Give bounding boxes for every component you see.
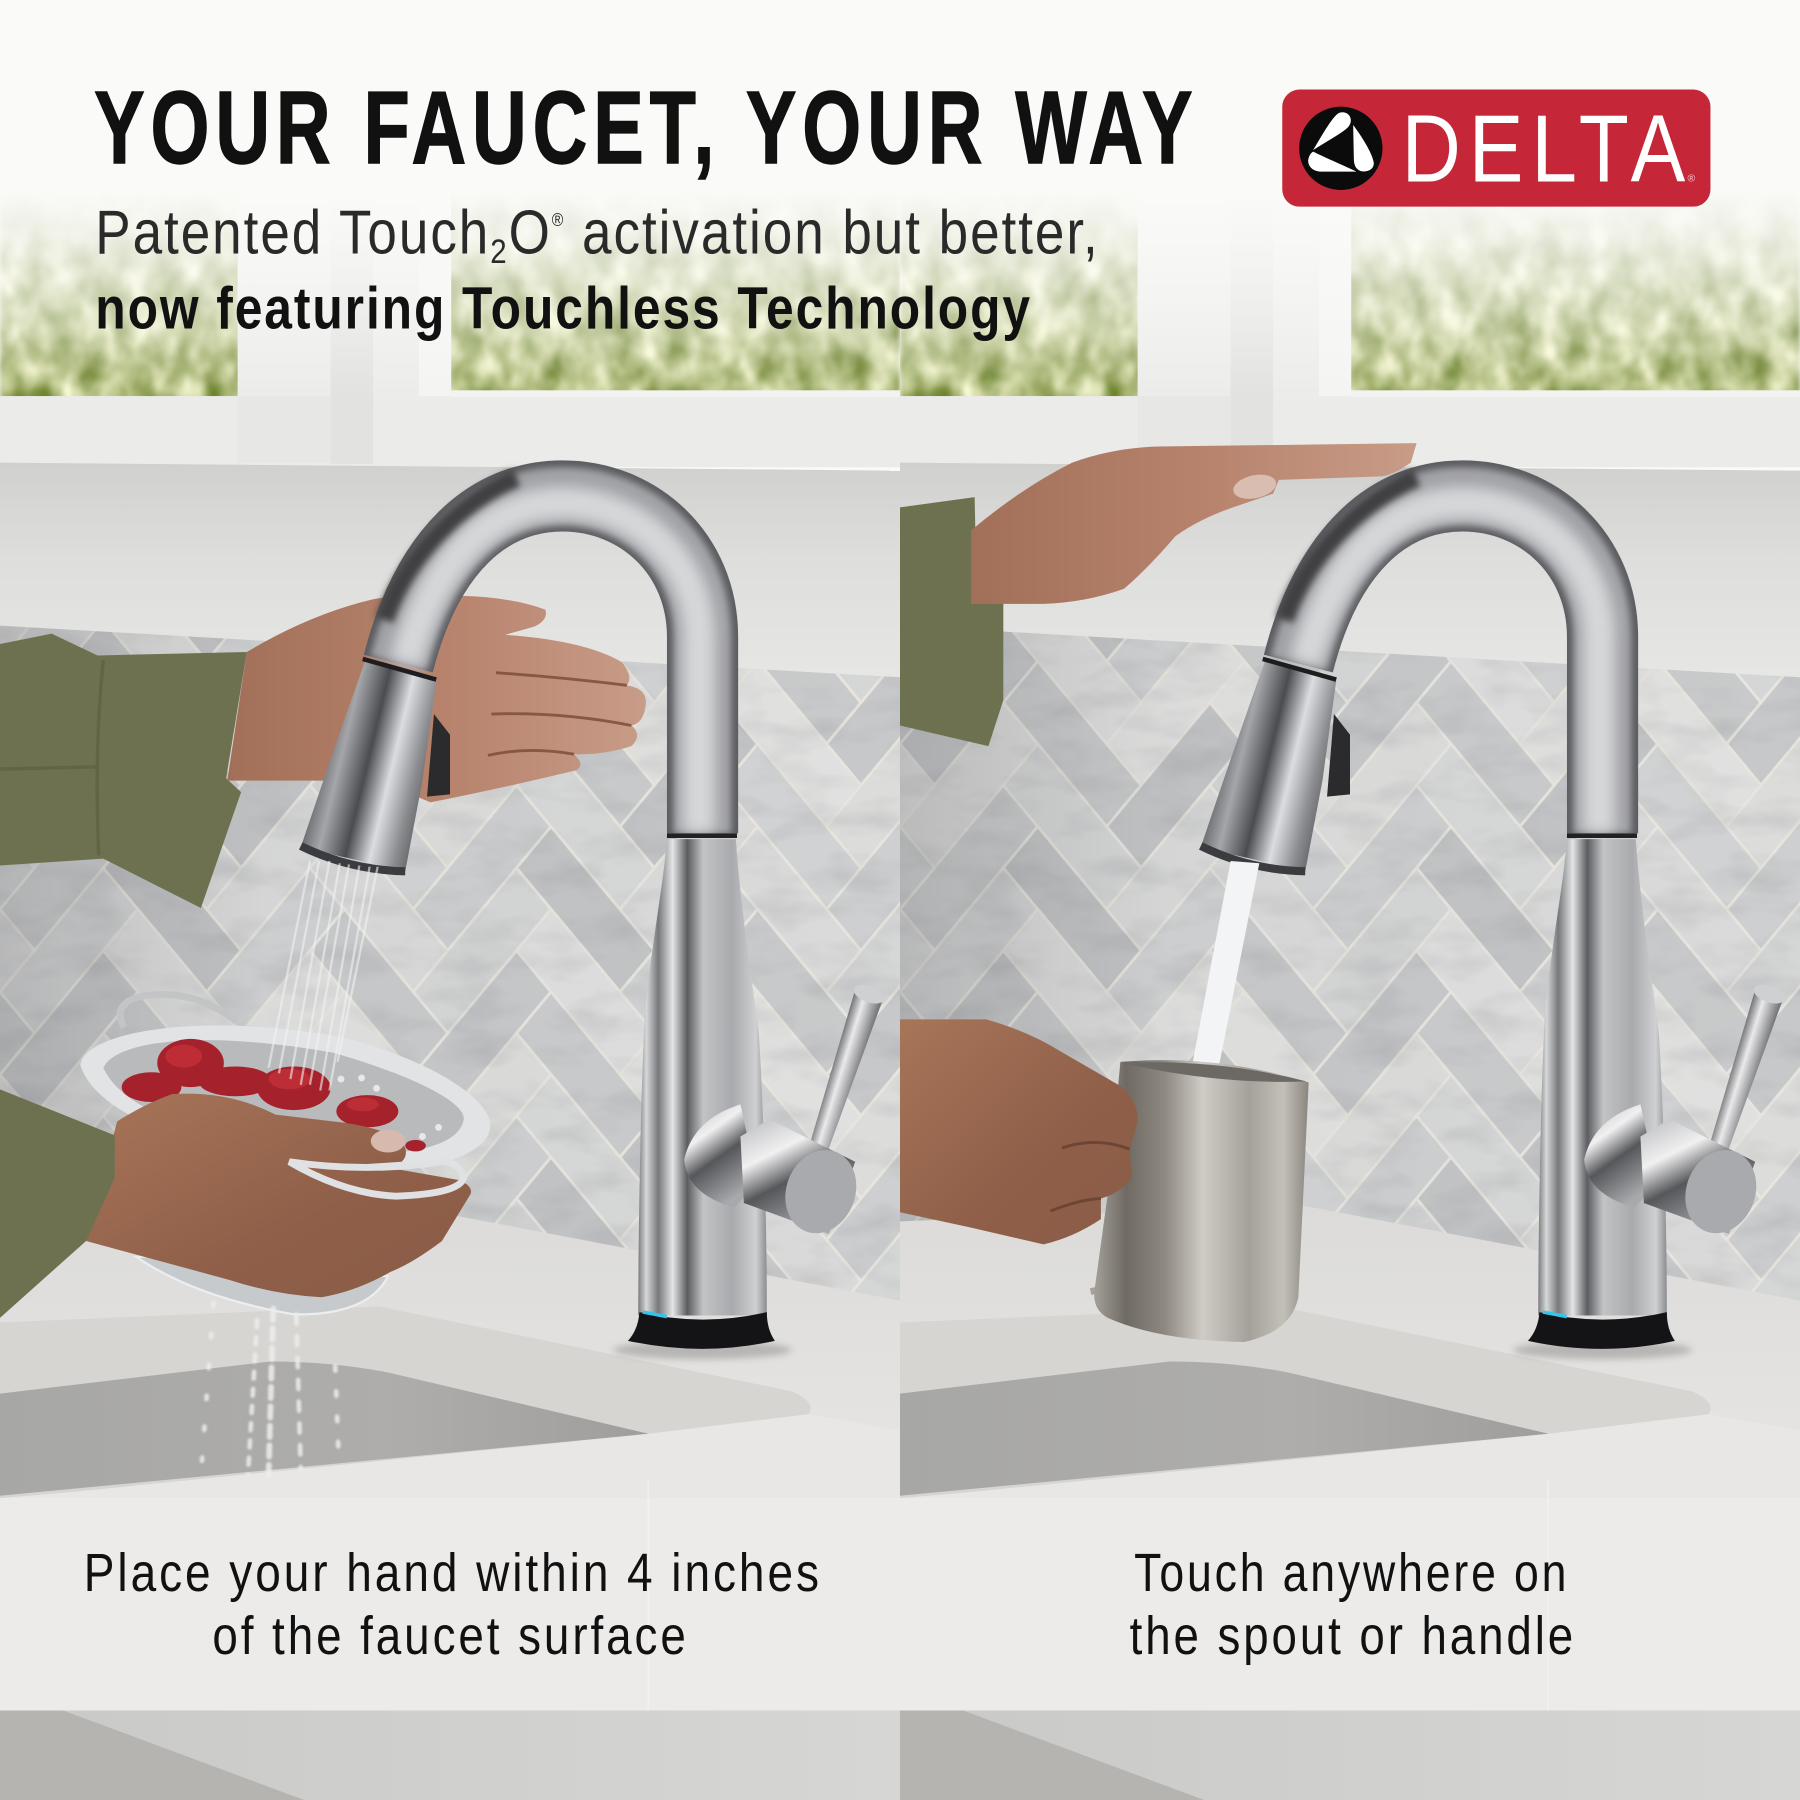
title: YOUR FAUCET, YOUR WAY bbox=[94, 69, 1198, 185]
colander bowl bbox=[80, 1025, 490, 1170]
caption: left: of the faucet surface bbox=[212, 1606, 689, 1666]
sleeve: lower arm bbox=[0, 1089, 115, 1318]
top fade bbox=[0, 0, 900, 396]
sink basin bbox=[0, 1361, 649, 1496]
thumbnail bbox=[371, 1130, 405, 1153]
neck ring bbox=[667, 833, 737, 838]
caption: right: Touch anywhere on bbox=[1134, 1543, 1569, 1603]
gooseneck spout bbox=[385, 478, 703, 833]
panel: left photo, colander rinsing bbox=[0, 0, 900, 1800]
caption: right bbox=[1130, 1543, 1576, 1666]
subtitle line 1: 2 bbox=[490, 233, 509, 271]
subtitle line 1: O bbox=[509, 199, 552, 268]
colander base bbox=[137, 1251, 388, 1314]
colander rear handle bbox=[120, 994, 236, 1027]
pull-down sprayhead bbox=[301, 659, 436, 871]
water drips bbox=[201, 1303, 339, 1475]
black base bbox=[628, 1312, 775, 1349]
subtitle line 1: Patented Touch bbox=[95, 199, 557, 268]
water spray bbox=[269, 861, 378, 1091]
mug bbox=[1091, 1060, 1309, 1342]
lever bbox=[809, 981, 887, 1155]
handle hub bbox=[684, 1104, 758, 1208]
faucet bbox=[301, 478, 887, 1359]
faucet body bbox=[638, 839, 767, 1316]
subtitle line 1: activation but better, bbox=[565, 199, 1100, 268]
caption: left: Place your hand within 4 inches bbox=[84, 1543, 822, 1603]
hand: holding mug bbox=[900, 1019, 1138, 1244]
countertop shadow bbox=[613, 1341, 792, 1359]
window frame bbox=[0, 172, 900, 467]
caption: right: the spout or handle bbox=[1130, 1606, 1576, 1666]
kitchen backdrop, right bbox=[900, 0, 1800, 1800]
faucet, right bbox=[1201, 478, 1787, 1359]
water stream bbox=[1190, 861, 1259, 1077]
handle cylinder bbox=[740, 1119, 868, 1243]
spray button bbox=[427, 714, 450, 797]
front counter bbox=[0, 1414, 900, 1499]
subtitle line 2: now featuring Touchless Technology bbox=[95, 274, 1032, 341]
sleeve: upper arm, right bbox=[900, 497, 1003, 746]
window view bbox=[0, 172, 900, 402]
hand: holding colander bbox=[86, 1094, 471, 1297]
herringbone marble backsplash bbox=[0, 620, 900, 1309]
colander front handle bbox=[289, 1162, 464, 1196]
logo badge bbox=[1282, 90, 1710, 207]
panel: right photo, touch spout bbox=[900, 0, 1800, 1800]
raspberries bbox=[122, 1039, 426, 1151]
logo wordmark: DELTA bbox=[1402, 96, 1693, 202]
upper ledge bbox=[0, 463, 900, 677]
caption: left bbox=[84, 1543, 822, 1666]
lower counter bbox=[0, 1481, 900, 1800]
countertop bbox=[0, 1205, 900, 1498]
sink rim bbox=[0, 1306, 811, 1498]
logo: Delta bbox=[1282, 90, 1710, 207]
subtitle line 1: ® bbox=[552, 209, 565, 230]
registered mark: ® bbox=[1688, 173, 1696, 184]
hand: open palm bbox=[227, 594, 646, 802]
logo mark bbox=[1299, 107, 1382, 190]
kitchen backdrop bbox=[0, 0, 900, 1800]
sleeve: upper arm bbox=[0, 634, 247, 908]
caption band bbox=[0, 1498, 900, 1710]
hand: touching spout bbox=[971, 443, 1417, 604]
